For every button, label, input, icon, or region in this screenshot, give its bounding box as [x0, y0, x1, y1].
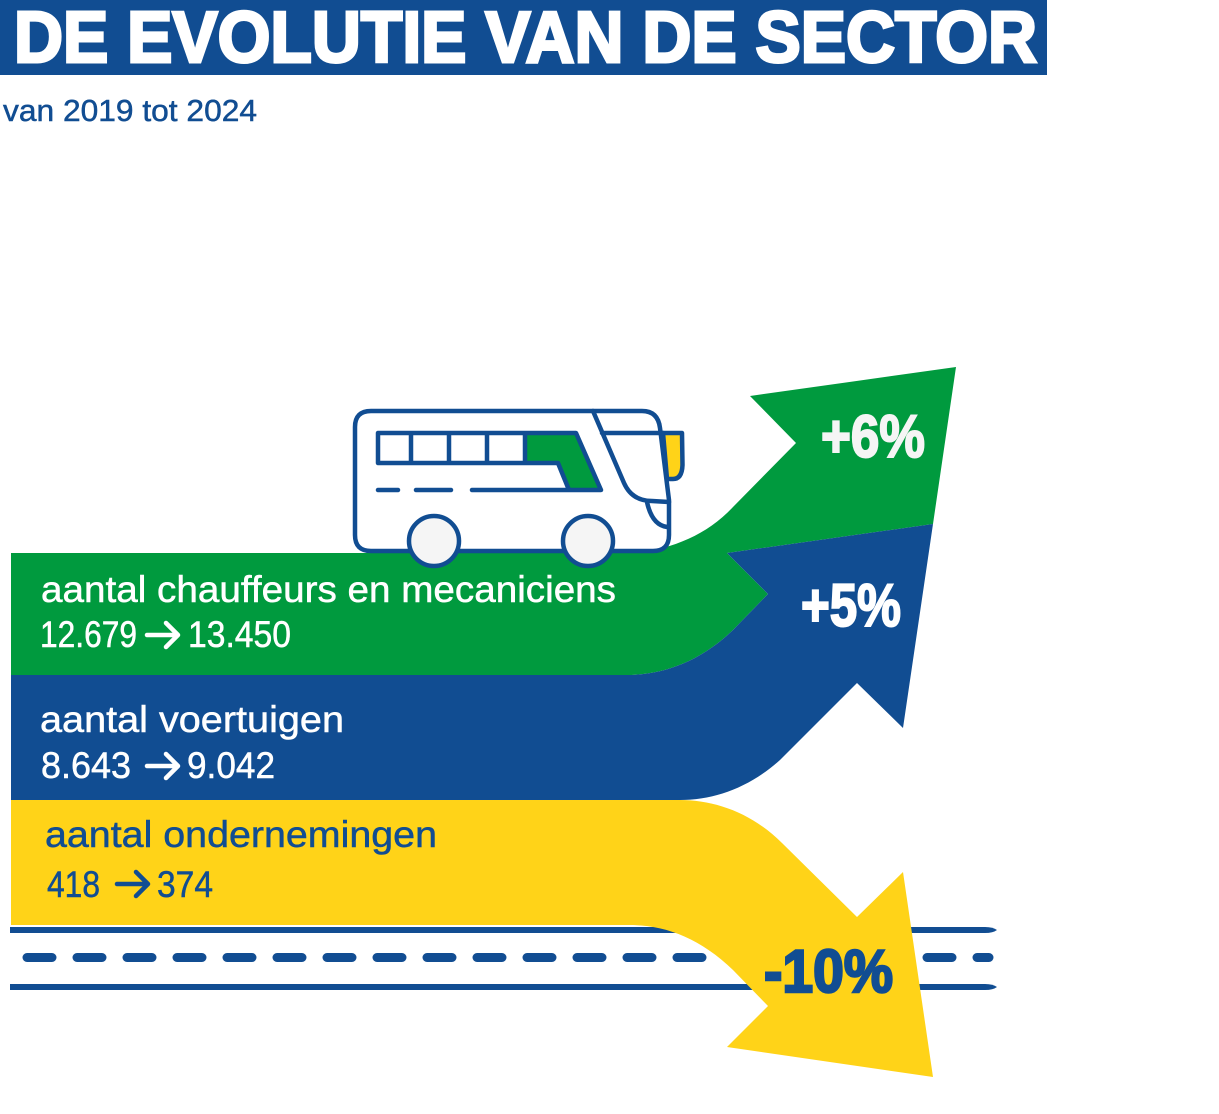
- yellow arrow: ondernemingen: [11, 800, 933, 1077]
- percentage: +5%: +5%: [801, 572, 901, 639]
- label: chauffeurs en mecaniciens: 13.450: [188, 614, 291, 655]
- road: [10, 927, 997, 990]
- label: ondernemingen: [45, 814, 437, 905]
- label: voertuigen: aantal voertuigen: [40, 699, 344, 740]
- label: chauffeurs en mecaniciens: [40, 569, 616, 655]
- label: voertuigen: 9.042: [187, 745, 275, 786]
- label: ondernemingen: 374: [157, 864, 213, 905]
- label: ondernemingen: aantal ondernemingen: [45, 814, 437, 855]
- label: chauffeurs en mecaniciens: aantal chauffeurs en mecaniciens: [41, 569, 616, 610]
- label: chauffeurs en mecaniciens: 12.679: [40, 614, 137, 655]
- percentage: -10%: -10%: [764, 938, 893, 1005]
- percentage: +6%: +6%: [821, 403, 925, 470]
- title banner: DE EVOLUTIE VAN DE SECTOR: [14, 0, 1037, 78]
- label: ondernemingen: 418: [47, 864, 100, 905]
- icon: bus: [355, 411, 682, 566]
- label: voertuigen: [40, 699, 344, 786]
- blue arrow: voertuigen: [11, 524, 933, 800]
- green arrow: chauffeurs en mecaniciens: [11, 367, 956, 675]
- subtitle: van 2019 tot 2024: [3, 93, 257, 128]
- label: voertuigen: 8.643: [41, 745, 131, 786]
